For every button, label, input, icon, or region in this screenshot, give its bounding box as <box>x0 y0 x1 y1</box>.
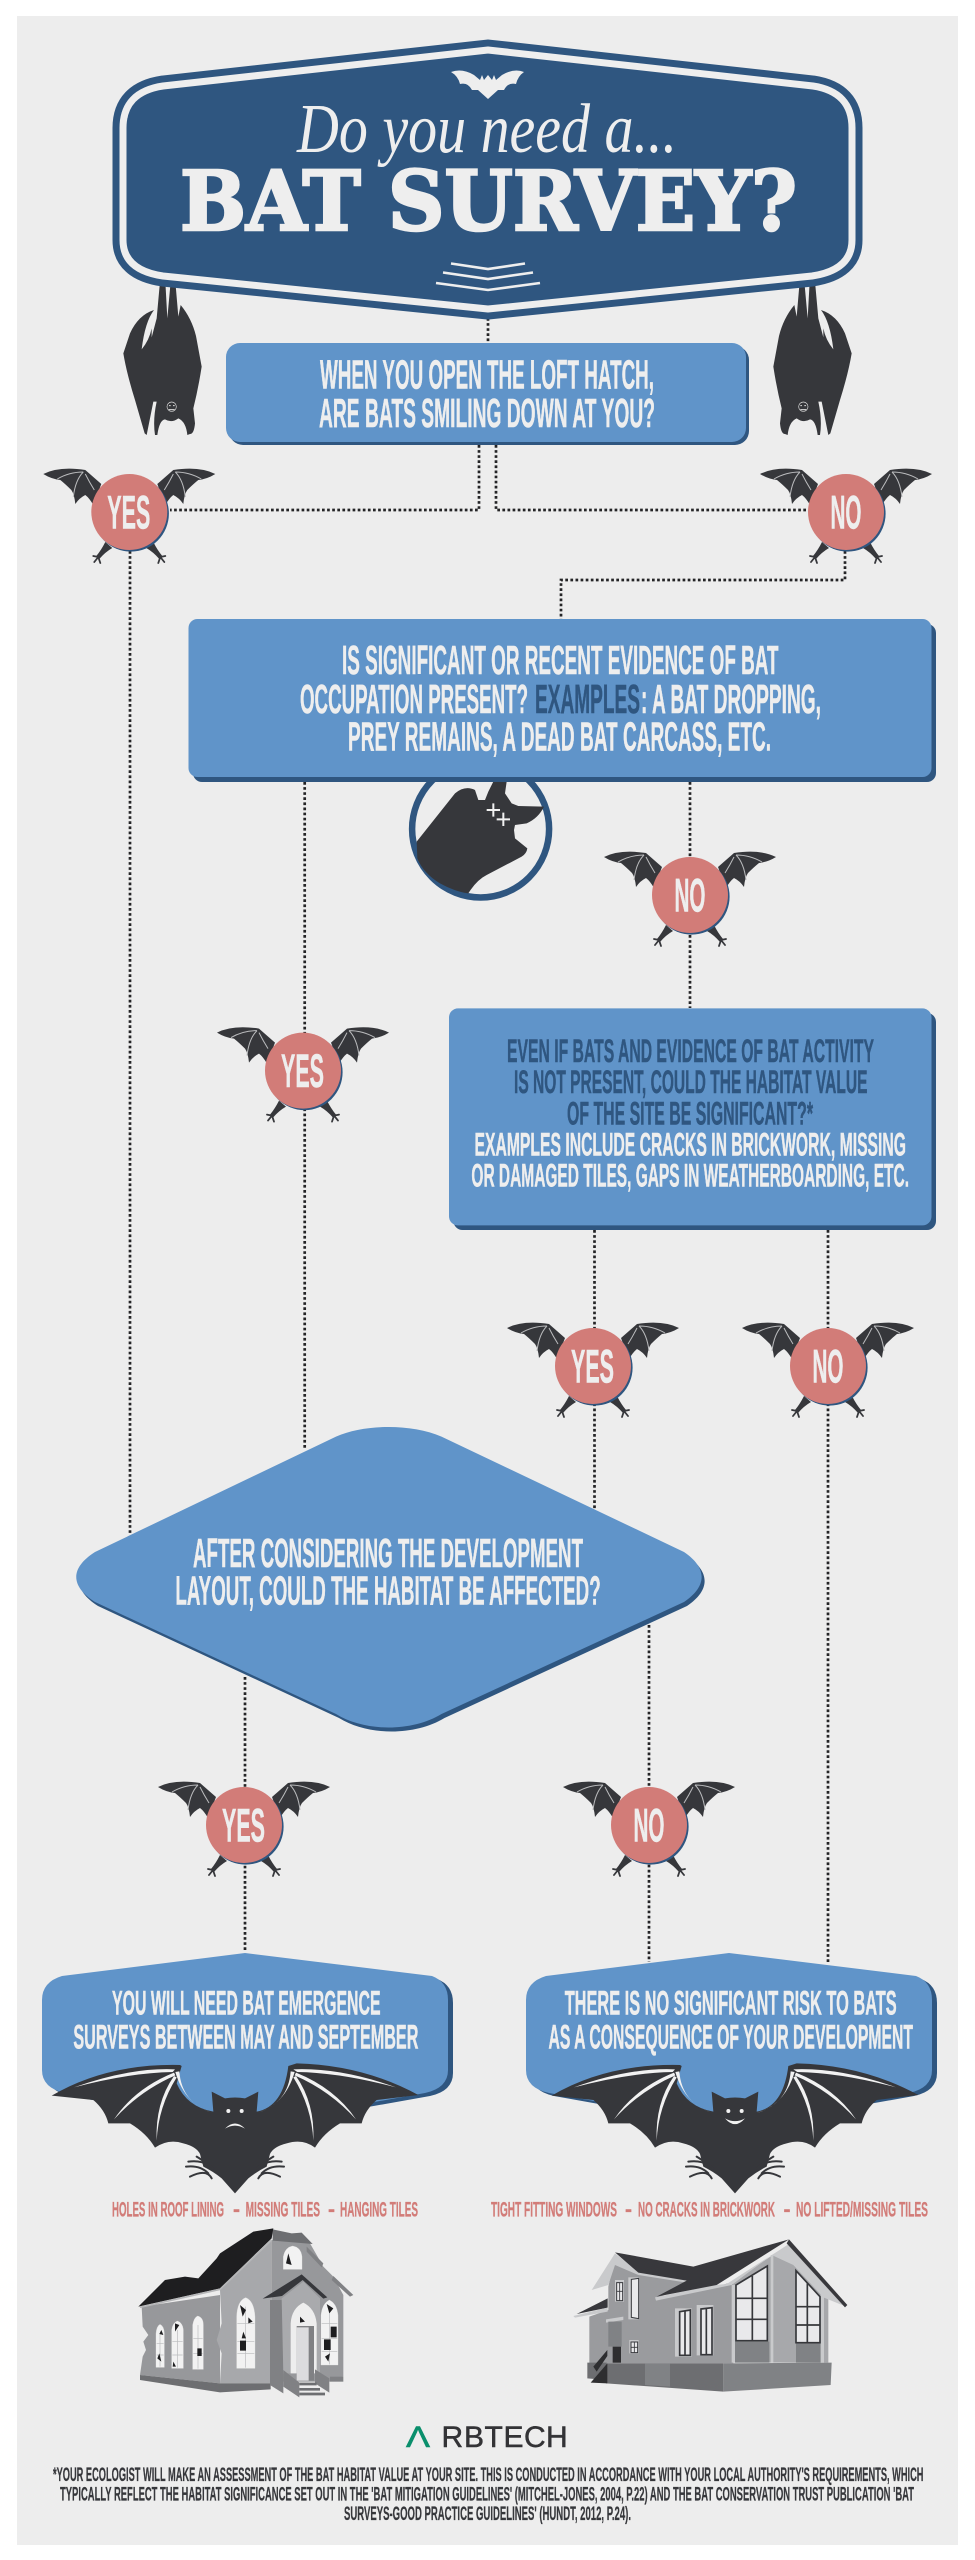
badge: YES 4: YES <box>222 1798 265 1852</box>
badge: YES 2: YES <box>281 1044 324 1097</box>
icon: dead bat in circle <box>412 760 549 898</box>
list: risk features: - <box>328 2198 335 2222</box>
badge: NO 2 <box>604 852 776 946</box>
icon: hanging bat right <box>773 282 852 435</box>
badge: NO 4: NO <box>634 1798 664 1852</box>
list: no-risk features: - <box>784 2198 790 2222</box>
badge: NO 3: NO <box>812 1340 844 1392</box>
heading: Do you need a...: Do you need a... <box>296 91 677 168</box>
footnote: SURVEYS-GOOD PRACTICE GUIDELINES' (HUNDT, 2012, P.24). <box>344 2504 631 2525</box>
question box 1 <box>226 343 749 445</box>
icon: happy bat <box>552 2063 918 2193</box>
list: no-risk features: - <box>625 2198 632 2222</box>
question box 2 <box>188 619 936 782</box>
question box 2: EXAMPLES <box>535 676 640 722</box>
result panel: no risk <box>526 1953 937 2193</box>
badge: YES 1 <box>43 469 215 563</box>
logo: Arbtech: Λ <box>406 2421 430 2454</box>
question box 3 <box>449 1008 936 1230</box>
illustration: modern house <box>573 2239 847 2392</box>
list: risk features: HOLES IN ROOF LINING <box>112 2198 224 2222</box>
title badge <box>123 50 852 309</box>
list: risk features: MISSING TILES <box>246 2198 320 2222</box>
question diamond <box>76 1427 705 1732</box>
list: no-risk features: NO CRACKS IN BRICKWORK <box>638 2198 775 2222</box>
result panel: survey needed <box>42 1953 453 2193</box>
icon: hanging bat left <box>123 282 202 435</box>
result panel: survey needed: SURVEYS BETWEEN MAY AND SEPTEMBER <box>73 2019 418 2057</box>
question box 2: OCCUPATION PRESENT? <box>300 676 528 722</box>
list: no-risk features: TIGHT FITTING WINDOWS <box>491 2198 617 2222</box>
badge: NO 4 <box>563 1782 735 1876</box>
badge: NO 1 <box>760 469 932 563</box>
badge: YES 1: YES <box>107 486 150 538</box>
badge: YES 2 <box>217 1027 389 1122</box>
logo: Arbtech: RBTECH <box>442 2421 568 2454</box>
badge: NO 2: NO <box>674 868 706 922</box>
badge: NO 3 <box>742 1323 914 1417</box>
result panel: survey needed: YOU WILL NEED BAT EMERGENCE <box>112 1984 381 2022</box>
list: risk features: - <box>233 2198 240 2222</box>
text: HANGING TILES <box>340 2198 418 2222</box>
heading: BAT SURVEY?: BAT SURVEY? <box>180 154 797 250</box>
badge: NO 1: NO <box>830 486 862 538</box>
list: no-risk features <box>491 2198 928 2222</box>
illustration: derelict church <box>138 2228 353 2397</box>
icon: sad bat <box>52 2063 418 2193</box>
badge: YES 3 <box>507 1323 679 1417</box>
badge: YES 3: YES <box>571 1340 614 1392</box>
icon: chevrons <box>436 264 540 290</box>
badge: YES 4 <box>158 1782 330 1876</box>
flow connector lines <box>130 318 845 1964</box>
footnote <box>53 2465 924 2525</box>
icon: small bat <box>451 71 524 99</box>
